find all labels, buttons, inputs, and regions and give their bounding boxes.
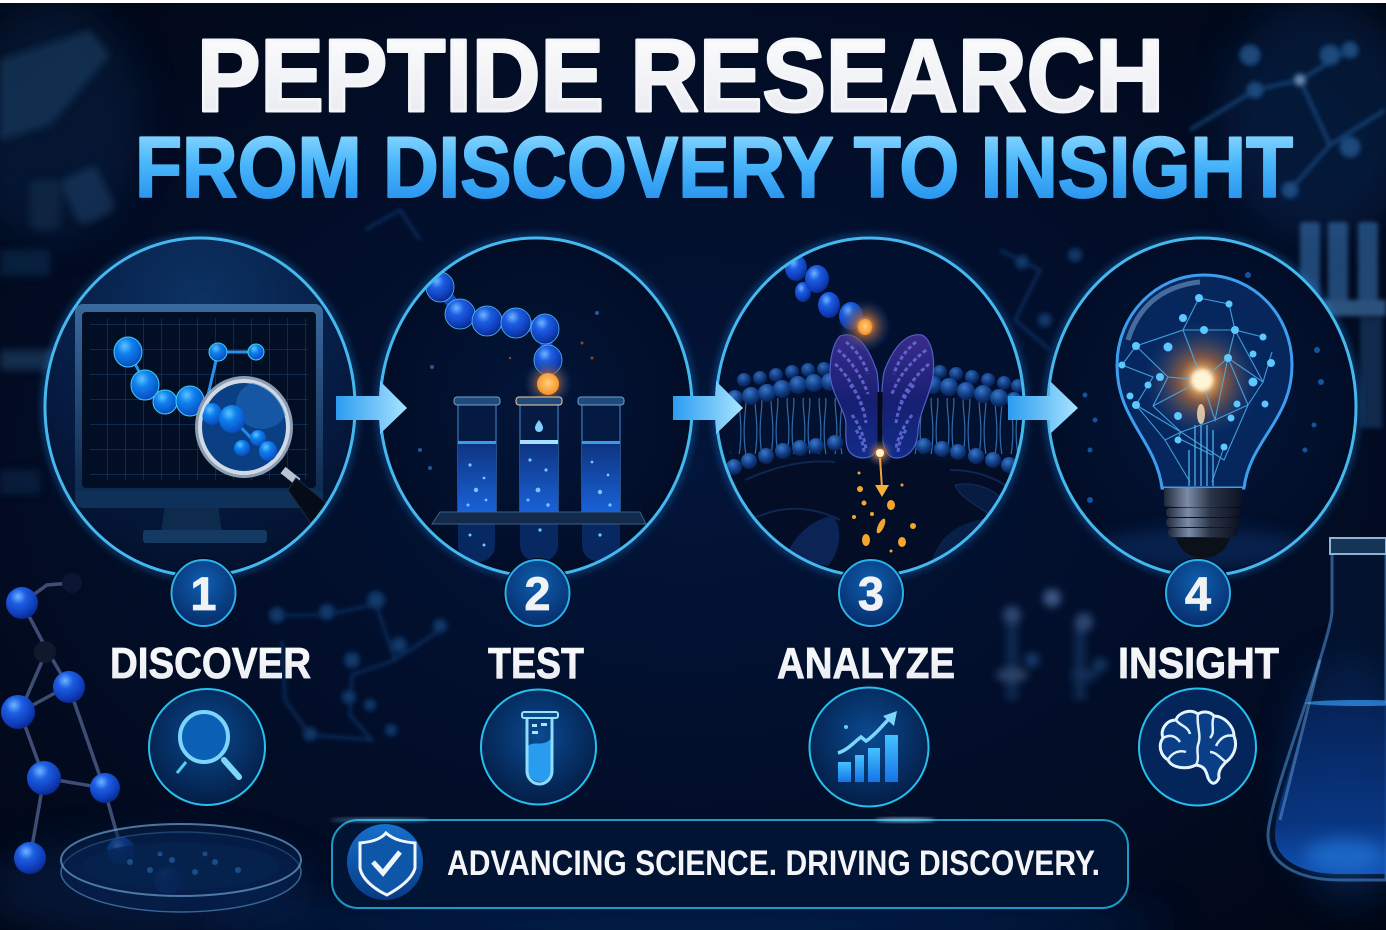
title line 1: PEPTIDE RESEARCH [197,18,1164,133]
panel: step 1 discover circle [45,238,355,576]
background: faint molecular network [270,210,1081,740]
circle rings [45,238,1356,576]
step 4 number badge [1164,558,1232,628]
panel: step 2 test circle [380,238,692,576]
floating sparks [418,311,599,470]
cell interior [726,460,1010,572]
background: blurred molecule bottom center [996,589,1107,700]
molecule on screen [114,337,264,416]
tagline panel [330,818,1128,908]
step 3 icon: rising chart [810,688,928,806]
petri dish [61,824,301,912]
panel: step 3 analyze circle [716,238,1026,580]
circle halos [45,238,1356,576]
light bulb [1117,275,1292,558]
network lines [1122,298,1272,482]
background: blurred test tubes right [1290,222,1386,428]
step 3 number badge: 3 [858,567,884,620]
step 1 number badge [170,558,238,628]
release arrow and sparks [852,439,916,552]
arrow 2 to 3 [673,381,743,434]
step 3 number badge [837,558,905,628]
tagline text: ADVANCING SCIENCE. DRIVING DISCOVERY. [447,844,1100,883]
peptide chain [785,255,891,352]
step 2 number badge: 2 [524,567,551,620]
step 2 number badge [504,558,572,628]
icon: shield [347,824,423,900]
step 4 label: INSIGHT [1118,639,1279,688]
magnifying glass [195,376,335,525]
background: blurred molecule top right [1190,43,1385,197]
lipid membrane [726,362,1025,475]
step 1 label: DISCOVER [110,639,311,688]
panel: step 4 insight circle [1048,238,1356,576]
step 3 label: ANALYZE [777,639,955,688]
step 2 icon: test tube [481,690,596,804]
arrow 3 to 4 [1008,381,1078,434]
faint nodes [1082,272,1324,503]
title [135,18,1293,216]
step 1 number badge: 1 [190,567,217,620]
arrow 1 to 2 [336,381,407,434]
network nodes [1118,294,1275,450]
step 4 number badge: 4 [1185,567,1211,620]
monitor [75,304,323,543]
ion channel protein [830,335,934,458]
test tubes and rack [432,397,646,562]
step 4 icon: brain [1139,688,1256,806]
step 2 label: TEST [488,639,584,688]
step 1 icon: magnifier [149,689,265,805]
flask bottom right [1268,538,1386,880]
background: blurred microscope [0,30,117,494]
peptide chain [426,272,572,407]
molecule: bottom left [1,573,182,894]
